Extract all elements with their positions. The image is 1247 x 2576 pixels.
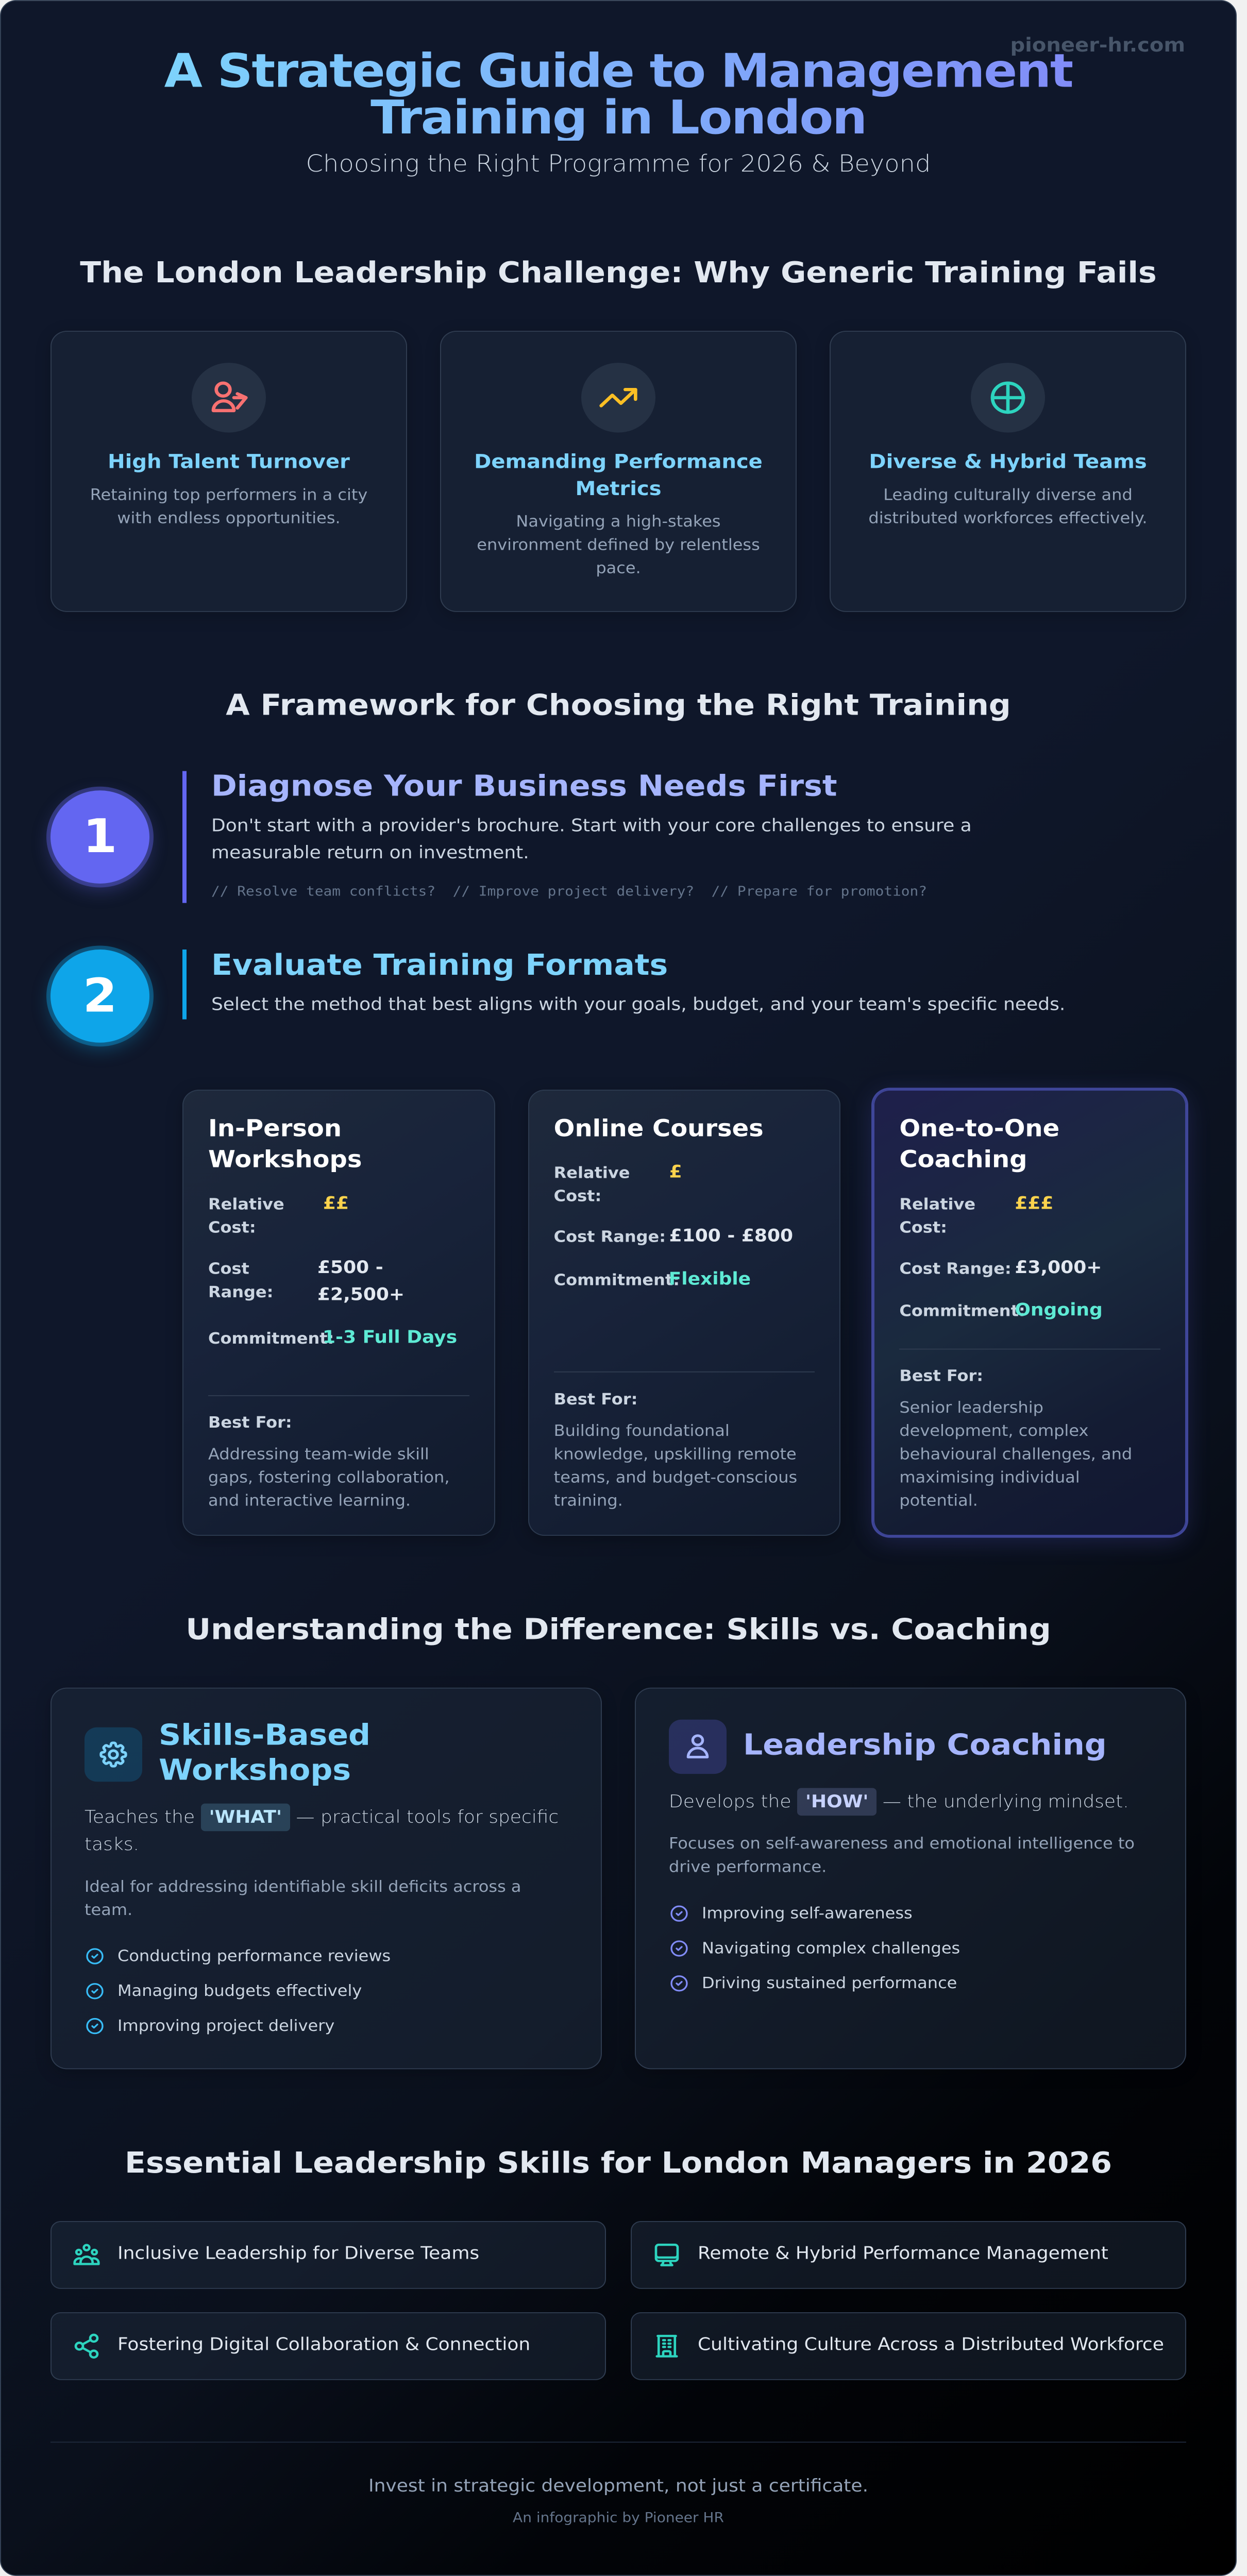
step text: Don't start with a provider's brochure. Start with your core challenges to ensure a [211, 816, 972, 835]
commitment label: Commitment: [899, 1301, 1025, 1320]
card text [868, 485, 1148, 527]
step 2 [41, 946, 1180, 1536]
best for label: Best For: [208, 1413, 292, 1432]
best for text: and interactive learning. [208, 1491, 411, 1510]
title [164, 44, 1072, 144]
card text [90, 485, 367, 527]
icon: trending up [581, 363, 655, 433]
panel title: Leadership Coaching [743, 1728, 1107, 1762]
footer tagline: Invest in strategic development, not just a certificate. [368, 2476, 868, 2496]
subtitle: Choosing the Right Programme for 2026 & Beyond [306, 150, 931, 178]
brand url: pioneer-hr.com [1010, 34, 1185, 56]
panel: skills-based workshops [50, 1688, 602, 2069]
lead text with WHAT tag [85, 1804, 559, 1858]
card title: Metrics [575, 478, 662, 500]
commitment label: Commitment: [208, 1329, 334, 1348]
panel title [159, 1718, 370, 1788]
relative cost value: £££ [1015, 1193, 1053, 1213]
check icon [85, 1946, 105, 1966]
icon: globe [971, 363, 1045, 433]
relative cost label: Cost: [899, 1218, 947, 1236]
cost range label: Cost Range: [899, 1259, 1012, 1278]
best for text: development, complex [899, 1421, 1088, 1439]
panel: one-to-one coaching (highlighted) [873, 1090, 1186, 1536]
relative cost label: Cost: [208, 1218, 256, 1236]
card text: Leading culturally diverse and [883, 485, 1133, 504]
card title [474, 450, 763, 500]
lead text with HOW tag: Develops the 'HOW' — the underlying mindset. [669, 1792, 1129, 1811]
check icon [85, 1981, 105, 2001]
list item: Driving sustained performance [702, 1974, 957, 1992]
card text: Navigating a high-stakes [516, 512, 721, 530]
panel: high talent turnover [50, 331, 407, 612]
cost range label [208, 1259, 273, 1301]
card text: Retaining top performers in a city [90, 485, 367, 504]
heading: essential skills: Essential Leadership Skills for London Managers in 2026 [125, 2146, 1112, 2180]
accent bar [182, 950, 187, 1020]
step title: Diagnose Your Business Needs First [211, 769, 837, 803]
commitment value: Ongoing [1015, 1300, 1103, 1320]
card text: pace. [596, 558, 641, 577]
check icon [669, 1974, 689, 1993]
panel: leadership coaching [635, 1688, 1186, 2069]
lead text with WHAT tag: Teaches the 'WHAT' — practical tools for specific [85, 1807, 559, 1827]
number badge 1: 1 [83, 809, 117, 863]
icon: group [72, 2242, 101, 2268]
skill text: Inclusive Leadership for Diverse Teams [117, 2243, 479, 2263]
list item: Improving self-awareness [702, 1904, 913, 1922]
best for text [899, 1395, 1132, 1512]
format title: Workshops [208, 1146, 362, 1173]
best for text: knowledge, upskilling remote [554, 1445, 797, 1463]
cost range value: £2,500+ [317, 1284, 405, 1304]
relative cost label: Relative [208, 1195, 284, 1213]
step 1 [41, 769, 972, 903]
skill: digital collaboration [50, 2312, 606, 2380]
relative cost label [208, 1195, 284, 1236]
best for label: Best For: [899, 1366, 983, 1385]
commitment value: Flexible [669, 1269, 751, 1289]
best for text: training. [554, 1491, 623, 1510]
panel: online courses [528, 1090, 840, 1536]
best for text [208, 1445, 449, 1510]
skill: cultivating culture [631, 2312, 1186, 2380]
check icon [85, 2016, 105, 2036]
format title: Coaching [899, 1146, 1027, 1173]
cost range value: £500 - [317, 1257, 383, 1277]
cost range value [317, 1257, 405, 1304]
card title: High Talent Turnover [108, 450, 350, 473]
card title: Demanding Performance [474, 450, 763, 473]
skill: remote and hybrid [631, 2221, 1186, 2289]
panel title: Workshops [159, 1753, 351, 1787]
supporting text [85, 1875, 521, 1921]
supporting text: Focuses on self-awareness and emotional intelligence to [669, 1834, 1135, 1853]
format title [208, 1115, 362, 1173]
commitment value: 1-3 Full Days [323, 1327, 457, 1347]
number badge 2: 2 [83, 969, 117, 1023]
panel: diverse and hybrid teams [830, 331, 1186, 612]
best for text [554, 1419, 797, 1512]
heading: framework: A Framework for Choosing the Right Training [226, 688, 1011, 722]
skill text: Remote & Hybrid Performance Management [698, 2243, 1108, 2263]
icon: share nodes [72, 2332, 101, 2360]
supporting text [669, 1832, 1135, 1878]
cost range value: £3,000+ [1015, 1257, 1102, 1277]
footer credit: An infographic by Pioneer HR [513, 2510, 724, 2526]
step text: Select the method that best aligns with your goals, budget, and your team's specific needs. [211, 994, 1065, 1014]
best for text: gaps, fostering collaboration, [208, 1468, 449, 1486]
card title: Diverse & Hybrid Teams [869, 450, 1147, 473]
panel: in-person workshops [182, 1090, 495, 1536]
relative cost label: Cost: [554, 1187, 601, 1205]
relative cost label: Relative [899, 1195, 975, 1213]
title: Training in London [370, 90, 866, 144]
supporting text: drive performance. [669, 1857, 827, 1876]
check icon [669, 1939, 689, 1958]
cost range label: Cost [208, 1259, 249, 1278]
icon: monitor [652, 2242, 681, 2268]
best for label: Best For: [554, 1390, 637, 1408]
relative cost label: Relative [554, 1163, 630, 1182]
best for text: Senior leadership [899, 1398, 1043, 1416]
list item: Conducting performance reviews [117, 1946, 391, 1965]
icon: person leaving [192, 363, 266, 433]
heading: the London leadership challenge: The London Leadership Challenge: Why Generic Training Fails [80, 256, 1157, 290]
lead text with WHAT tag: tasks. [85, 1834, 139, 1854]
accent bar [182, 771, 187, 903]
skill: inclusive leadership [50, 2221, 606, 2289]
card text: environment defined by relentless [477, 535, 760, 553]
skill text: Fostering Digital Collaboration & Connection [117, 2334, 530, 2354]
icon: person [669, 1720, 727, 1774]
cost range label: Range: [208, 1283, 273, 1301]
relative cost label [554, 1163, 630, 1205]
list item: Navigating complex challenges [702, 1939, 960, 1957]
format title: Online Courses [554, 1115, 764, 1142]
best for text: behavioural challenges, and [899, 1445, 1132, 1463]
best for text: maximising individual [899, 1468, 1080, 1486]
relative cost value: £ [669, 1162, 682, 1181]
supporting text: team. [85, 1901, 132, 1919]
best for text: teams, and budget-conscious [554, 1468, 797, 1486]
number badge 2 [50, 950, 149, 1043]
code style prompts: // Resolve team conflicts? // Improve project delivery? // Prepare for promotion? [211, 883, 927, 899]
list item: Improving project delivery [117, 2016, 334, 2035]
panel: demanding performance metrics [440, 331, 797, 612]
heading: skills vs coaching: Understanding the Difference: Skills vs. Coaching [186, 1613, 1051, 1647]
commitment label: Commitment: [554, 1270, 680, 1289]
step title: Evaluate Training Formats [211, 948, 668, 982]
card text: with endless opportunities. [117, 509, 341, 527]
icon: office building [652, 2332, 681, 2360]
format title: In-Person [208, 1115, 342, 1142]
card text: distributed workforces effectively. [868, 509, 1148, 527]
step text [211, 816, 972, 862]
best for text: Addressing team-wide skill [208, 1445, 429, 1463]
format title: One-to-One [899, 1115, 1059, 1142]
icon: gear [85, 1727, 142, 1782]
card text [477, 512, 760, 577]
step text: measurable return on investment. [211, 842, 529, 862]
cost range label: Cost Range: [554, 1227, 666, 1246]
panel title: Skills-Based [159, 1718, 370, 1752]
list item: Managing budgets effectively [117, 1981, 362, 1999]
check icon [669, 1904, 689, 1923]
relative cost value: ££ [323, 1193, 349, 1213]
skill text: Cultivating Culture Across a Distributed Workforce [698, 2334, 1164, 2354]
cost range value: £100 - £800 [669, 1226, 793, 1246]
format title [899, 1113, 1059, 1175]
title: A Strategic Guide to Management [164, 44, 1072, 98]
relative cost label [899, 1193, 975, 1239]
best for text: potential. [899, 1491, 978, 1510]
best for text: Building foundational [554, 1421, 730, 1440]
supporting text: Ideal for addressing identifiable skill deficits across a [85, 1877, 521, 1895]
number badge 1 [50, 790, 149, 884]
